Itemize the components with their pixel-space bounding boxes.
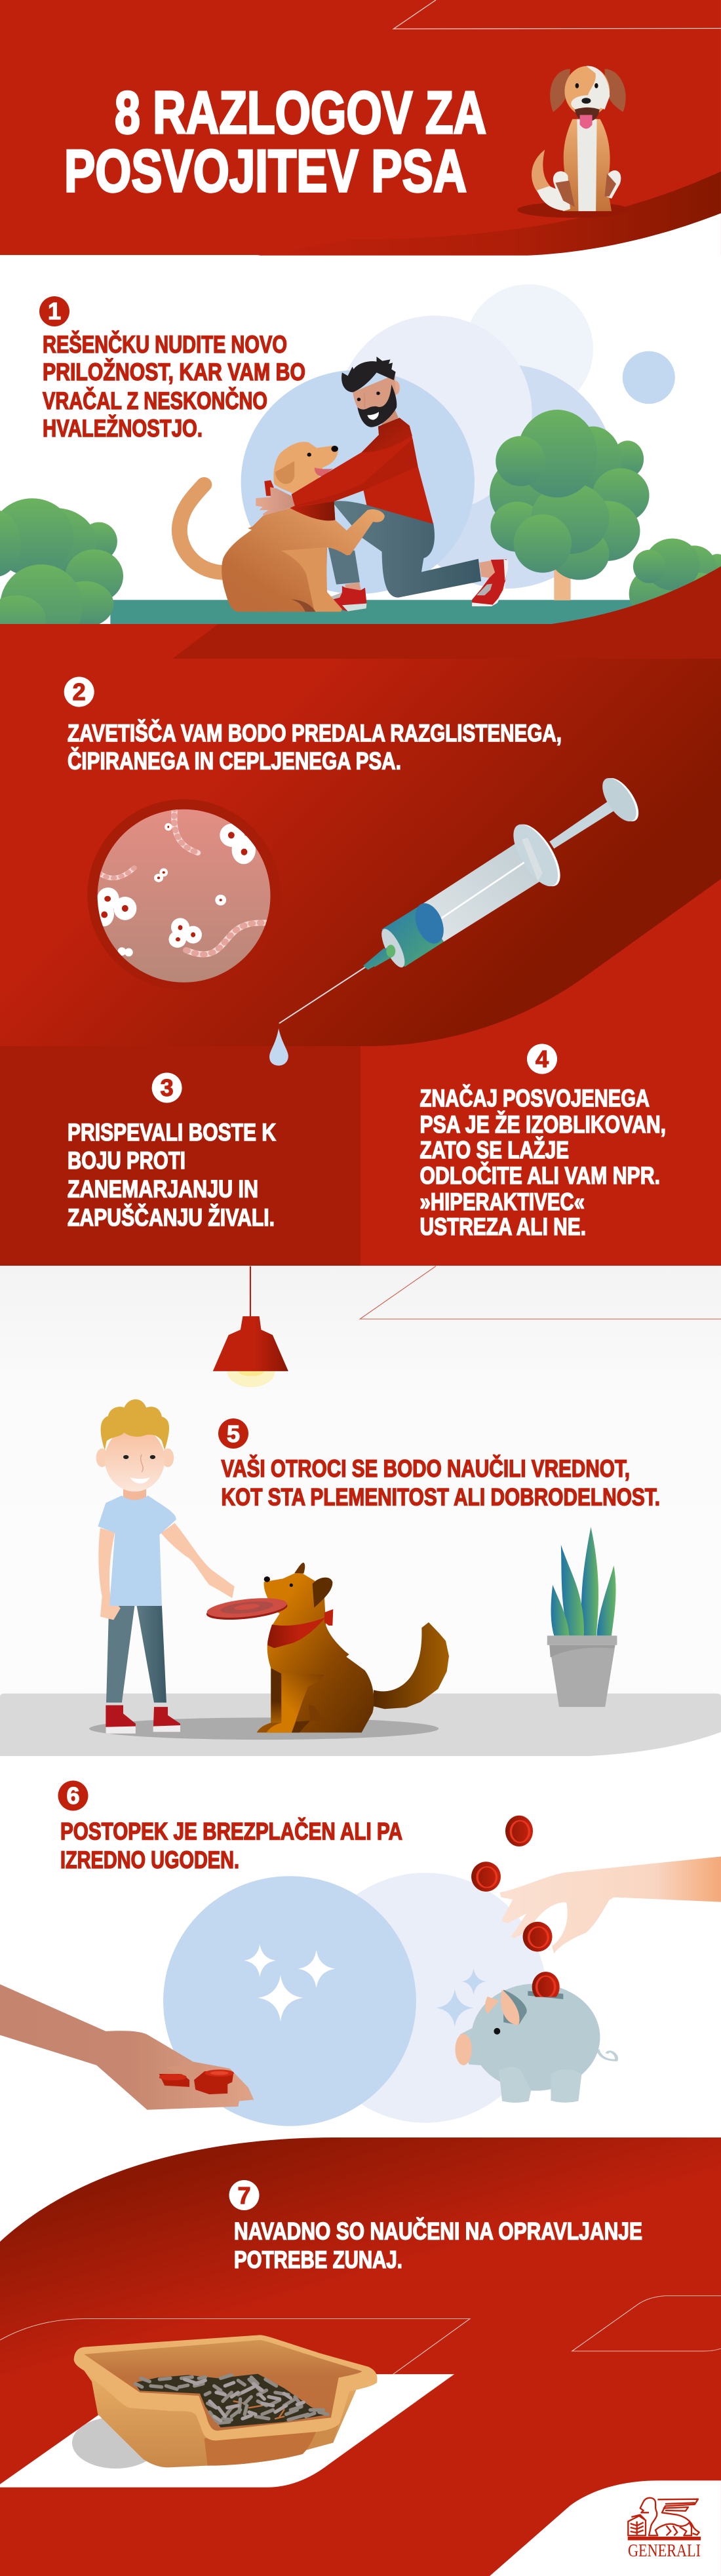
brown dog with frisbee (205, 1563, 449, 1732)
text: reason 2: ZAVETIŠČA VAM BODO PREDALA RAZGLISTENEGA, (68, 719, 562, 747)
panel: reason 5 (0, 1266, 721, 1756)
logo: Generali (628, 2498, 701, 2560)
text: reason 5 (222, 1454, 660, 1510)
litter box (72, 2335, 377, 2469)
text: reason 4: ZATO SE LAŽJE (419, 1136, 569, 1163)
text: reason 2: ČIPIRANEGA IN CEPLJENEGA PSA. (68, 747, 401, 775)
background circles (241, 284, 675, 594)
icon: potted plant (547, 1527, 617, 1707)
white mat (0, 2374, 454, 2488)
text: reason 1: REŠENČKU NUDITE NOVO (43, 330, 287, 358)
step number 1 (39, 296, 69, 326)
text: reason 3: ZANEMARJANJU IN (68, 1175, 258, 1203)
step number 3 (152, 1072, 182, 1103)
tree: lower right (629, 538, 721, 623)
lion emblem (628, 2498, 699, 2535)
icon: hand dropping coin (500, 1856, 721, 1953)
step number 1: 1 (48, 298, 61, 324)
tree: right (490, 410, 650, 600)
man and dog hugging (180, 357, 508, 612)
text: reason 4: PSA JE ŽE IZOBLIKOVAN, (419, 1110, 666, 1138)
text: reason 1: HVALEŽNOSTJO. (43, 414, 203, 442)
text: reason 3: BOJU PROTI (68, 1146, 185, 1174)
sparkles (244, 1944, 486, 2027)
text: reason 1: VRAČAL Z NESKONČNO (43, 387, 267, 414)
floor (0, 1694, 721, 1756)
text: reason 6 (60, 1818, 402, 1873)
text: reason 4: ZNAČAJ POSVOJENEGA (419, 1084, 650, 1112)
text: reason 6: IZREDNO UGODEN. (60, 1846, 239, 1873)
floor shadow (89, 1717, 438, 1740)
panel: reason 7 (0, 2137, 721, 2576)
panel: reason 1 (0, 284, 721, 648)
step number 3: 3 (161, 1074, 174, 1101)
tree: left (0, 498, 123, 624)
step number 7: 7 (237, 2182, 251, 2209)
step number 4 (527, 1044, 557, 1074)
panel: header (0, 0, 721, 256)
panel: reason 2 (0, 566, 721, 1266)
text: reason 2 (68, 719, 562, 775)
logo bar (628, 2537, 701, 2541)
icon: microscope view of worms (87, 799, 281, 990)
step number 6: 6 (66, 1782, 80, 1809)
text: reason 7: POTREBE ZUNAJ. (234, 2246, 402, 2273)
title (64, 80, 486, 205)
icon: piggy bank (455, 1972, 617, 2103)
title: 8 RAZLOGOV ZA (115, 80, 486, 146)
text: reason 4: »HIPERAKTIVEC« (419, 1188, 585, 1215)
step number 5: 5 (227, 1420, 240, 1447)
text: reason 4: ODLOČITE ALI VAM NPR. (419, 1161, 660, 1189)
falling coins (471, 1816, 553, 1951)
text: reason 3 (68, 1118, 276, 1231)
text: reason 4 (419, 1084, 666, 1240)
panel: reason 3 (0, 1046, 360, 1266)
title: POSVOJITEV PSA (64, 138, 467, 205)
text: reason 3: ZAPUŠČANJU ŽIVALI. (68, 1203, 275, 1231)
step number 2: 2 (73, 678, 86, 705)
step number 4: 4 (536, 1045, 549, 1072)
panel: reason 4 (419, 1044, 666, 1240)
panel: reason 6 (0, 1780, 721, 2126)
text: reason 6: POSTOPEK JE BREZPLAČEN ALI PA (60, 1818, 402, 1845)
ground (110, 600, 721, 624)
step number 2 (64, 676, 94, 707)
text: reason 3: PRISPEVALI BOSTE K (68, 1118, 276, 1146)
icon: sitting dog (517, 66, 629, 218)
icon: syringe (279, 773, 646, 1023)
text: reason 4: USTREZA ALI NE. (419, 1213, 586, 1240)
text: reason 7 (234, 2217, 642, 2273)
text: reason 1: PRILOŽNOST, KAR VAM BO (43, 358, 305, 385)
boy (96, 1399, 235, 1734)
step number 6 (58, 1780, 88, 1810)
logo wordmark: GENERALI (628, 2541, 701, 2560)
text: reason 1 (43, 330, 305, 442)
icon: water drop (269, 1028, 288, 1066)
background ellipses (163, 1873, 547, 2126)
icon: hand with coins (0, 1984, 254, 2110)
step number 7 (229, 2180, 260, 2210)
white logo corner (490, 2480, 721, 2576)
step number 5 (218, 1418, 248, 1449)
icon: ceiling lamp (213, 1266, 288, 1387)
